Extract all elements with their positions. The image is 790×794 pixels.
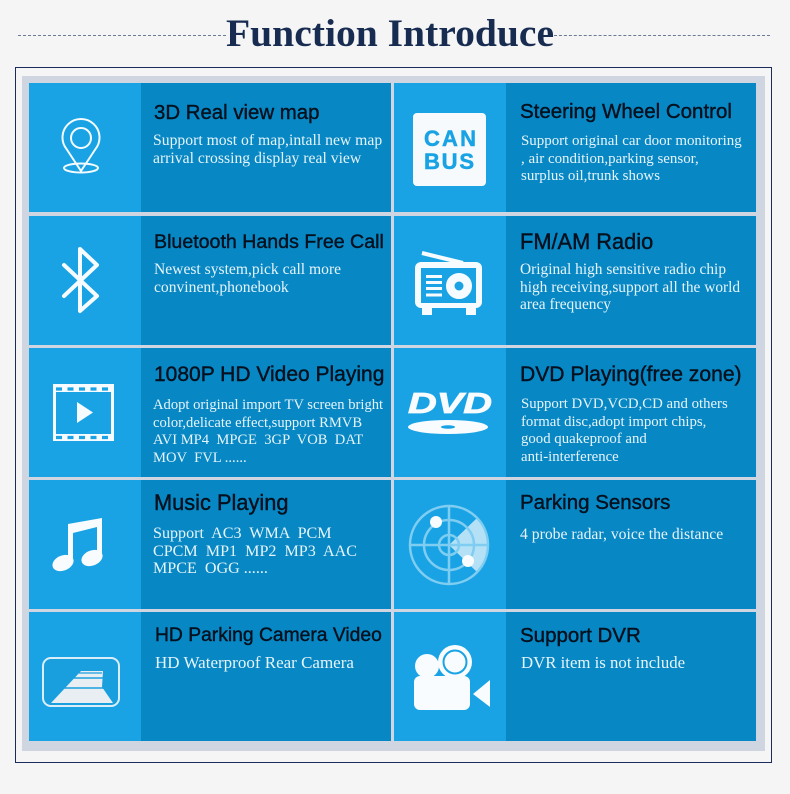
- icon: video camera: [414, 645, 490, 710]
- panel: FM/AM radio: [394, 216, 756, 345]
- description: Adopt original import TV screen bright color,delicate effect,support RMVB AVI MP4 MPGE 3GP VOB DAT MOV FVL ......: [153, 397, 383, 466]
- panel: 3D real view map: [29, 83, 391, 212]
- panel: DVD playing: [394, 348, 756, 477]
- icon: map pin: [62, 118, 100, 174]
- heading: Bluetooth Hands Free Call: [154, 231, 384, 253]
- description: Support original car door monitoring , air condition,parking sensor, surplus oil,trunk shows: [521, 133, 742, 184]
- panel: music playing: [29, 480, 391, 609]
- heading: Steering Wheel Control: [520, 100, 732, 123]
- heading: DVD Playing(free zone): [520, 363, 742, 386]
- panel: 1080P HD video playing: [29, 348, 391, 477]
- feature grid panel: [22, 76, 765, 751]
- heading: FM/AM Radio: [520, 229, 653, 254]
- icon: radar: [408, 504, 490, 586]
- heading: Parking Sensors: [520, 491, 670, 514]
- heading: HD Parking Camera Video: [155, 625, 382, 646]
- description: 4 probe radar, voice the distance: [520, 526, 723, 543]
- heading: 1080P HD Video Playing: [154, 363, 384, 386]
- icon: CAN BUS: BUS: [424, 149, 474, 174]
- panel: parking sensors: [394, 480, 756, 609]
- icon: film strip with play: [53, 384, 114, 441]
- icon: DVD logo: DVD: [408, 388, 492, 420]
- heading: 3D Real view map: [154, 102, 319, 124]
- panel: support DVR: [394, 612, 756, 741]
- description: Support DVD,VCD,CD and others format disc,adopt import chips, good quakeproof and anti-interference: [521, 396, 728, 465]
- icon: radio: [415, 251, 482, 315]
- panel: steering wheel control: [394, 83, 756, 212]
- heading: Support DVR: [520, 624, 641, 647]
- icon: music note: [52, 518, 103, 572]
- description: Original high sensitive radio chip high receiving,support all the world area frequency: [520, 261, 740, 313]
- description: DVR item is not include: [521, 653, 685, 672]
- panel: HD parking camera video: [29, 612, 391, 741]
- description: Support AC3 WMA PCM CPCM MP1 MP2 MP3 AAC MPCE OGG ......: [153, 525, 357, 577]
- icon: rear camera view: [42, 657, 120, 707]
- icon: DVD logo: [408, 388, 492, 434]
- icon: Bluetooth: [62, 247, 100, 314]
- description: Newest system,pick call more convinent,phonebook: [154, 261, 341, 296]
- description: Support most of map,intall new map arrival crossing display real view: [153, 132, 382, 167]
- title: Function Introduce: [226, 11, 554, 55]
- heading: Music Playing: [154, 490, 288, 515]
- icon: CAN BUS: [413, 113, 486, 186]
- description: HD Waterproof Rear Camera: [155, 653, 354, 672]
- panel: Bluetooth hands free call: [29, 216, 391, 345]
- icon: CAN BUS: CAN: [424, 126, 476, 151]
